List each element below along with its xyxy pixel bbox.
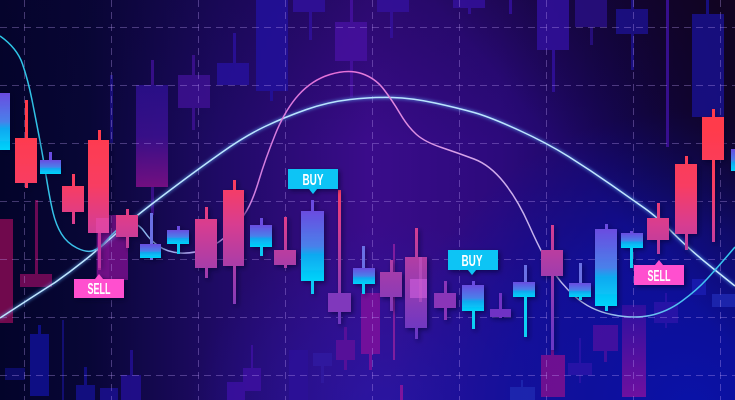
candle 21 (513, 265, 535, 337)
label: BUY right (448, 250, 498, 275)
candle 23 (569, 263, 591, 300)
slow moving average line (0, 97, 735, 318)
candle 22 (541, 225, 563, 350)
candle 5 (88, 130, 109, 268)
translucent candle overlays (96, 218, 427, 302)
label: BUY left: BUY (302, 172, 324, 189)
candle 19 (462, 281, 484, 329)
candle 29 (731, 149, 735, 171)
candle 12 (274, 217, 296, 268)
candle 13 (301, 200, 324, 294)
candle 1 (0, 93, 10, 150)
candle 2 (15, 100, 37, 188)
candle 18 (434, 281, 456, 320)
label: SELL right (634, 260, 684, 285)
fast moving average line (0, 36, 735, 317)
candle 8 (167, 226, 189, 254)
candle 24 (595, 224, 617, 311)
candle 27 (675, 156, 697, 250)
candle 3 (40, 152, 61, 174)
candle 17 (405, 228, 427, 339)
candle 6 (116, 209, 138, 248)
label: BUY right: BUY (462, 253, 483, 270)
candle 28 (702, 109, 724, 242)
bright candlesticks (0, 93, 735, 350)
label: SELL right: SELL (648, 268, 671, 285)
candle 15 (353, 246, 375, 294)
candle 26 (647, 203, 669, 254)
candle 14 (328, 190, 351, 324)
label: SELL left: SELL (88, 281, 111, 298)
candle 20 (490, 293, 511, 318)
candle 9 (195, 207, 217, 278)
label: BUY left (288, 169, 338, 194)
candle 10 (223, 180, 244, 304)
candle 25 (621, 231, 643, 268)
candle 7 (140, 213, 161, 260)
candle 16 (380, 260, 402, 311)
candle 11 (250, 218, 272, 256)
label: SELL left (74, 274, 124, 298)
candle 4 (62, 174, 84, 224)
